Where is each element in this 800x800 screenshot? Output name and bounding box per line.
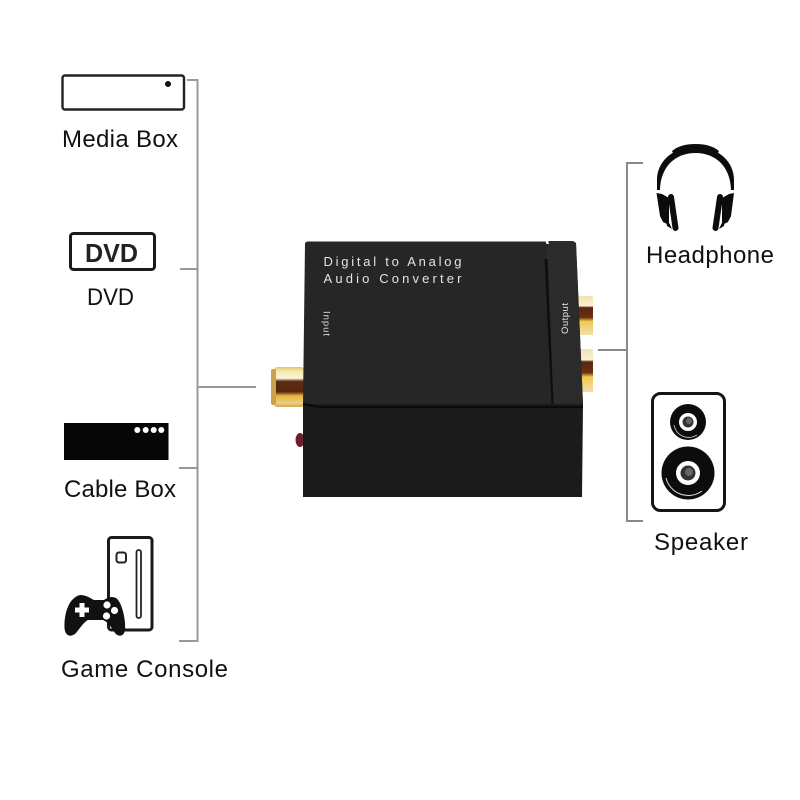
output RCA jacks	[577, 296, 593, 392]
label: Cable Box: Cable Box	[64, 476, 176, 503]
device title text	[324, 254, 462, 286]
right end block	[546, 241, 583, 404]
left connector bracket	[179, 80, 256, 641]
icon: game console	[64, 538, 152, 636]
icon: speaker	[652, 394, 724, 510]
icon: cable box	[64, 423, 168, 460]
label: Headphone: Headphone	[646, 242, 774, 269]
front face	[303, 404, 583, 497]
icon: gamepad	[64, 595, 125, 636]
device title text: Audio Converter	[324, 271, 462, 286]
label: Game Console: Game Console	[61, 656, 228, 683]
input label: Input	[320, 311, 332, 336]
device title text: Digital to Analog	[324, 254, 462, 269]
icon: media box	[62, 76, 184, 110]
icon: DVD	[70, 234, 154, 270]
label: Speaker: Speaker	[654, 529, 748, 556]
right connector bracket	[598, 163, 643, 521]
icon: DVD: DVD	[85, 238, 138, 268]
power LED	[296, 433, 304, 447]
converter device	[271, 241, 593, 497]
output label: Output	[560, 303, 571, 334]
label: DVD: DVD	[87, 284, 134, 311]
label: Media Box: Media Box	[62, 126, 178, 153]
slot groove	[544, 259, 554, 404]
top face	[303, 241, 583, 404]
input RCA jack	[271, 367, 304, 407]
icon: headphones	[656, 144, 734, 229]
